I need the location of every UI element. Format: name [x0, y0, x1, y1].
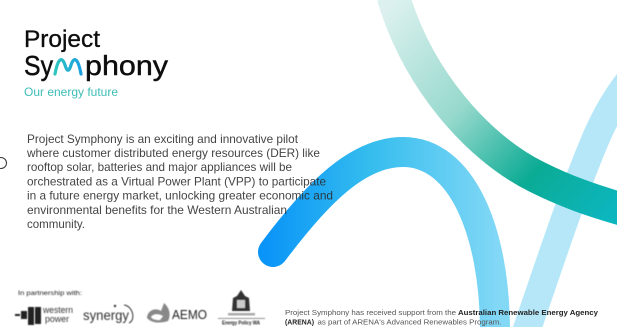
- icon: western power blocks: [15, 307, 41, 325]
- ribbon: blue gradient: [273, 152, 495, 327]
- description paragraph: environmental benefits for the Western Australian: [27, 203, 287, 217]
- partners heading: In partnership with:: [18, 290, 82, 297]
- logo word: Symphony: [24, 50, 168, 81]
- logo: Energy Policy WA: [218, 290, 265, 326]
- ARENA acknowledgement: Project Symphony has received support from the: [285, 308, 456, 317]
- ARENA acknowledgement: [285, 308, 598, 326]
- logo: Western Power: [15, 305, 73, 325]
- logo word: Symphony: Sy: [24, 50, 53, 81]
- ARENA acknowledgement: Australian Renewable Energy Agency: [458, 308, 598, 317]
- description paragraph: [26, 132, 333, 231]
- logo: AEMO: AEMO: [172, 307, 207, 322]
- partners row: [15, 290, 265, 326]
- description paragraph: Project Symphony is an exciting and innovative pilot: [27, 132, 299, 146]
- description paragraph: orchestrated as a Virtual Power Plant (VPP) to participate: [27, 174, 326, 188]
- edge circle fragment: [0, 158, 6, 168]
- logo: AEMO: [147, 303, 207, 323]
- logo word: Symphony: phony: [85, 50, 168, 81]
- ARENA acknowledgement: as part of ARENA's Advanced Renewables Program.: [318, 318, 502, 326]
- logo: Project Symphony: [24, 26, 168, 99]
- icon: AEMO swoosh: [147, 303, 170, 323]
- logo tagline: Our energy future: [24, 85, 118, 99]
- logo: Energy Policy WA: Energy Policy WA: [222, 320, 260, 326]
- logo: Synergy: synergy: [83, 307, 129, 323]
- logo word: Project: Project: [24, 26, 100, 53]
- logo: Western Power: power: [45, 314, 69, 324]
- ribbon: light blue: [526, 68, 617, 327]
- icon: WA crest: [232, 290, 250, 311]
- ARENA acknowledgement: (ARENA): [285, 318, 315, 326]
- description paragraph: community.: [27, 217, 85, 231]
- description paragraph: rooftop solar, batteries and major appliances will be: [27, 160, 292, 174]
- description paragraph: in a future energy market, unlocking greater economic and: [27, 188, 333, 202]
- description paragraph: where customer distributed energy resources (DER) like: [26, 146, 320, 160]
- ribbon: teal gradient: [393, 0, 617, 210]
- logo: Western Power: western: [42, 305, 73, 315]
